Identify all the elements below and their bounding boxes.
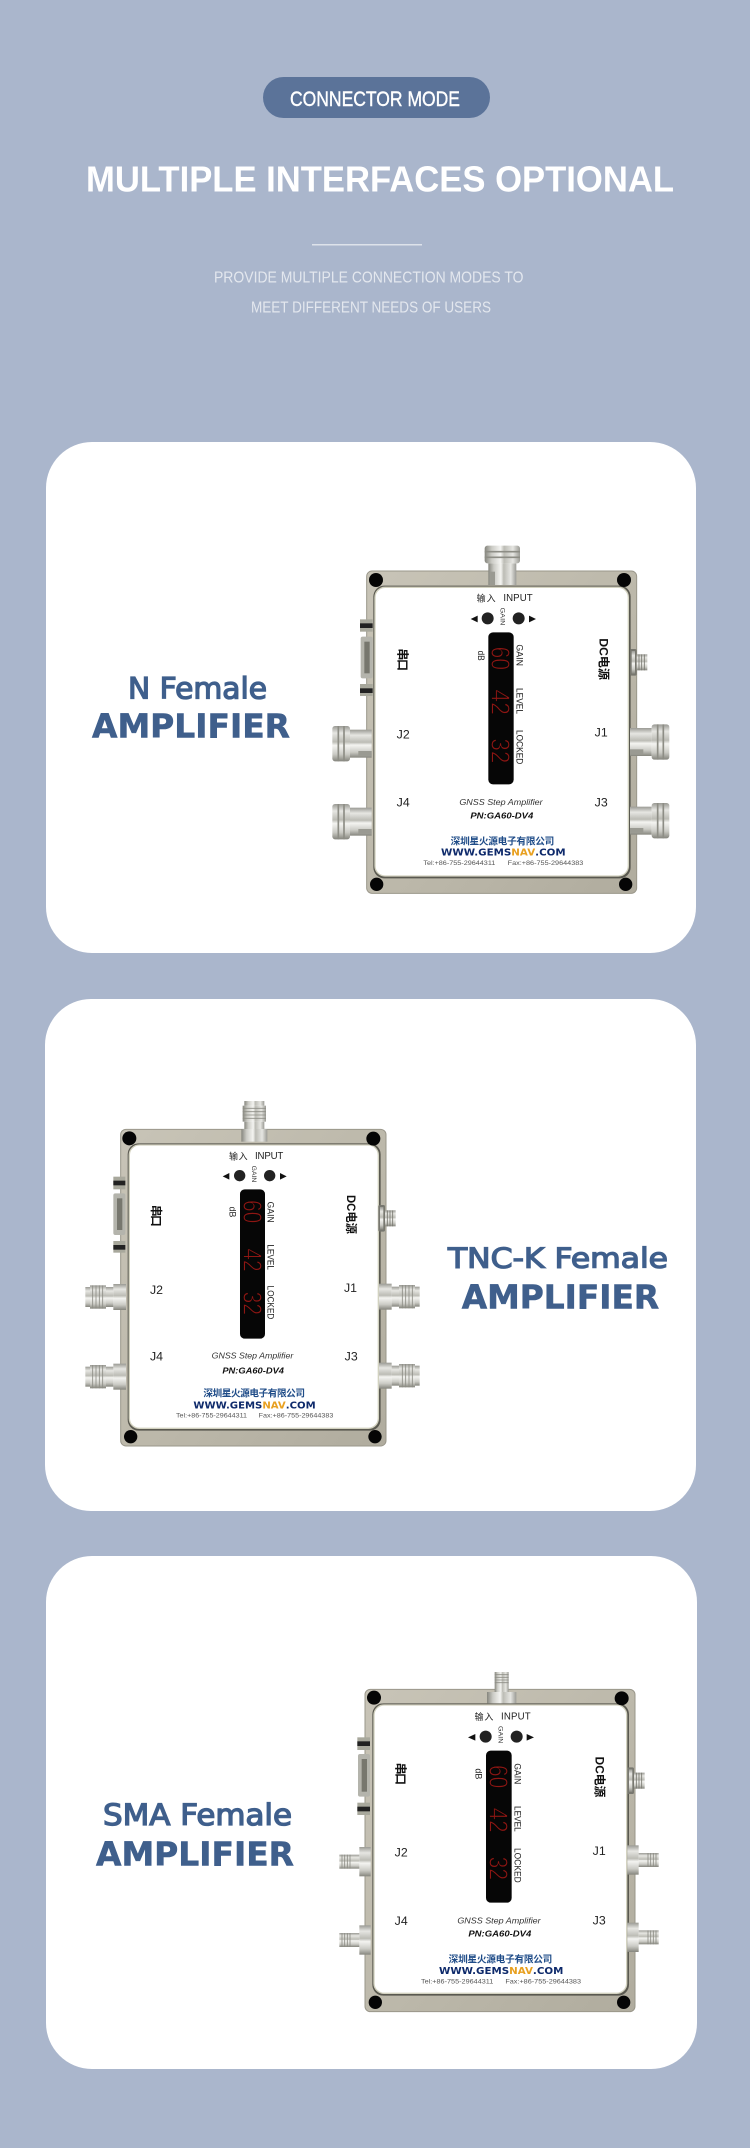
device: amplifier with TNC connectors: Tel:+86-755-29644311: [176, 1413, 248, 1419]
device: amplifier with N connectors: J4: [397, 796, 410, 810]
device: amplifier with TNC connectors: 输入: [229, 1150, 248, 1161]
device: amplifier with TNC connectors: [85, 1101, 420, 1446]
device: amplifier with TNC connectors: PN:GA60-DV4: [222, 1365, 284, 1375]
device: amplifier with N connectors: 输入: [477, 592, 496, 603]
panel: TNC-K Female amplifier: [45, 999, 696, 1511]
subtitle text: [214, 270, 524, 317]
device: amplifier with SMA connectors: Fax:+86-755-29644383: [505, 1979, 582, 1985]
device: amplifier with TNC connectors: 32: [237, 1292, 267, 1315]
device: amplifier with TNC connectors: 42: [237, 1248, 267, 1272]
heading: TNC-K Female amplifier: [447, 1242, 668, 1316]
device: amplifier with N connectors: PN:GA60-DV4: [470, 811, 534, 821]
device: amplifier with TNC connectors: DC电源: [344, 1195, 358, 1234]
device: amplifier with SMA connectors: [339, 1672, 659, 2012]
device: amplifier with SMA connectors: LOCKED: [513, 1848, 523, 1883]
device: amplifier with N connectors: Tel:+86-755-29644311: [423, 861, 496, 867]
device: amplifier with SMA connectors: 42: [484, 1808, 514, 1833]
device: amplifier with TNC connectors: LEVEL: [266, 1244, 276, 1270]
device: amplifier with TNC connectors: GAIN: [250, 1166, 257, 1183]
device: amplifier with N connectors: 串口: [396, 648, 410, 671]
title: MULTIPLE INTERFACES OPTIONAL: [86, 158, 674, 200]
device: amplifier with SMA connectors: 串口: [393, 1763, 407, 1785]
device: amplifier with TNC connectors: 60: [237, 1200, 267, 1223]
device: amplifier with SMA connectors: 60: [484, 1765, 514, 1788]
device: amplifier with TNC connectors: Fax:+86-755-29644383: [259, 1413, 334, 1419]
heading: SMA Female amplifier: AMPLIFIER: [96, 1835, 294, 1874]
device: amplifier with N connectors: WWW.GEMSNAV.COM: [441, 848, 566, 859]
header badge: connector mode: CONNECTOR MODE: [290, 88, 460, 111]
device: amplifier with SMA connectors: 32: [484, 1857, 514, 1880]
device: amplifier with TNC connectors: 深圳星火源电子有限公司: [203, 1388, 305, 1400]
device: amplifier with TNC connectors: 串口: [149, 1205, 163, 1227]
device: amplifier with N connectors: LOCKED: [515, 730, 525, 765]
device: amplifier with N connectors: GAIN: [498, 608, 505, 626]
heading: SMA Female amplifier: SMA Female: [103, 1798, 292, 1832]
device: amplifier with SMA connectors: J2: [395, 1846, 408, 1860]
device: amplifier with N connectors: LEVEL: [515, 688, 525, 714]
heading: SMA Female amplifier: [96, 1798, 294, 1874]
device: amplifier with N connectors: GAIN: [515, 644, 525, 666]
heading: N Female amplifier: [92, 671, 290, 745]
device: amplifier with SMA connectors: J3: [593, 1913, 606, 1927]
heading: TNC-K Female amplifier: AMPLIFIER: [462, 1277, 659, 1316]
device: amplifier with TNC connectors: GAIN: [266, 1202, 276, 1223]
device: amplifier with N connectors: J1: [595, 726, 608, 740]
device: amplifier with SMA connectors: J4: [395, 1914, 408, 1928]
heading: N Female amplifier: N Female: [128, 671, 267, 705]
device: amplifier with N connectors: dB: [476, 651, 486, 661]
device: amplifier with SMA connectors: PN:GA60-DV4: [468, 1929, 532, 1939]
device: amplifier with SMA connectors: GNSS Step Amplifier: [457, 1915, 542, 1925]
device: amplifier with N connectors: 60: [486, 647, 516, 670]
device: amplifier with SMA connectors: GAIN: [513, 1763, 523, 1784]
device: amplifier with N connectors: INPUT: [503, 593, 533, 604]
device: amplifier with N connectors: DC电源: [597, 638, 612, 680]
device: amplifier with TNC connectors: GNSS Step Amplifier: [212, 1351, 295, 1361]
device: amplifier with N connectors: J2: [397, 727, 410, 741]
device: amplifier with N connectors: 32: [486, 738, 516, 763]
device: amplifier with SMA connectors: WWW.GEMSNAV.COM: [439, 1966, 563, 1977]
panel: N Female amplifier: [46, 442, 696, 953]
panel: SMA Female amplifier: [46, 1556, 697, 2069]
device: amplifier with N connectors: Fax:+86-755-29644383: [508, 861, 584, 867]
device: amplifier with SMA connectors: Tel:+86-755-29644311: [421, 1979, 494, 1985]
device: amplifier with N connectors: 深圳星火源电子有限公司: [451, 835, 554, 847]
subtitle text: PROVIDE MULTIPLE CONNECTION MODES TO: [214, 270, 524, 287]
device: amplifier with TNC connectors: LOCKED: [266, 1286, 276, 1320]
subtitle text: MEET DIFFERENT NEEDS OF USERS: [251, 300, 491, 317]
device: amplifier with TNC connectors: J1: [344, 1281, 357, 1295]
device: amplifier with N connectors: 42: [486, 689, 516, 715]
device: amplifier with SMA connectors: 输入: [475, 1711, 493, 1722]
device: amplifier with TNC connectors: dB: [228, 1207, 238, 1217]
device: amplifier with SMA connectors: GAIN: [496, 1726, 503, 1744]
device: amplifier with SMA connectors: INPUT: [501, 1711, 531, 1722]
device: amplifier with TNC connectors: J3: [345, 1350, 358, 1364]
device: amplifier with TNC connectors: INPUT: [255, 1151, 283, 1162]
device: amplifier with N connectors: J3: [595, 796, 608, 810]
device: amplifier with SMA connectors: dB: [473, 1768, 483, 1779]
device: amplifier with TNC connectors: J2: [150, 1283, 163, 1297]
header badge: connector mode: [263, 77, 490, 118]
device: amplifier with TNC connectors: WWW.GEMSNAV.COM: [193, 1400, 316, 1411]
device: amplifier with N connectors: GNSS Step Amplifier: [459, 797, 544, 807]
heading: N Female amplifier: AMPLIFIER: [92, 706, 290, 745]
device: amplifier with SMA connectors: J1: [593, 1844, 606, 1858]
device: amplifier with SMA connectors: LEVEL: [513, 1806, 523, 1832]
device: amplifier with SMA connectors: DC电源: [592, 1757, 607, 1797]
device: amplifier with SMA connectors: 深圳星火源电子有限公司: [449, 1954, 552, 1966]
device: amplifier with TNC connectors: J4: [150, 1350, 163, 1364]
device: amplifier with N connectors: [332, 546, 669, 893]
heading: TNC-K Female amplifier: TNC-K Female: [447, 1242, 668, 1275]
